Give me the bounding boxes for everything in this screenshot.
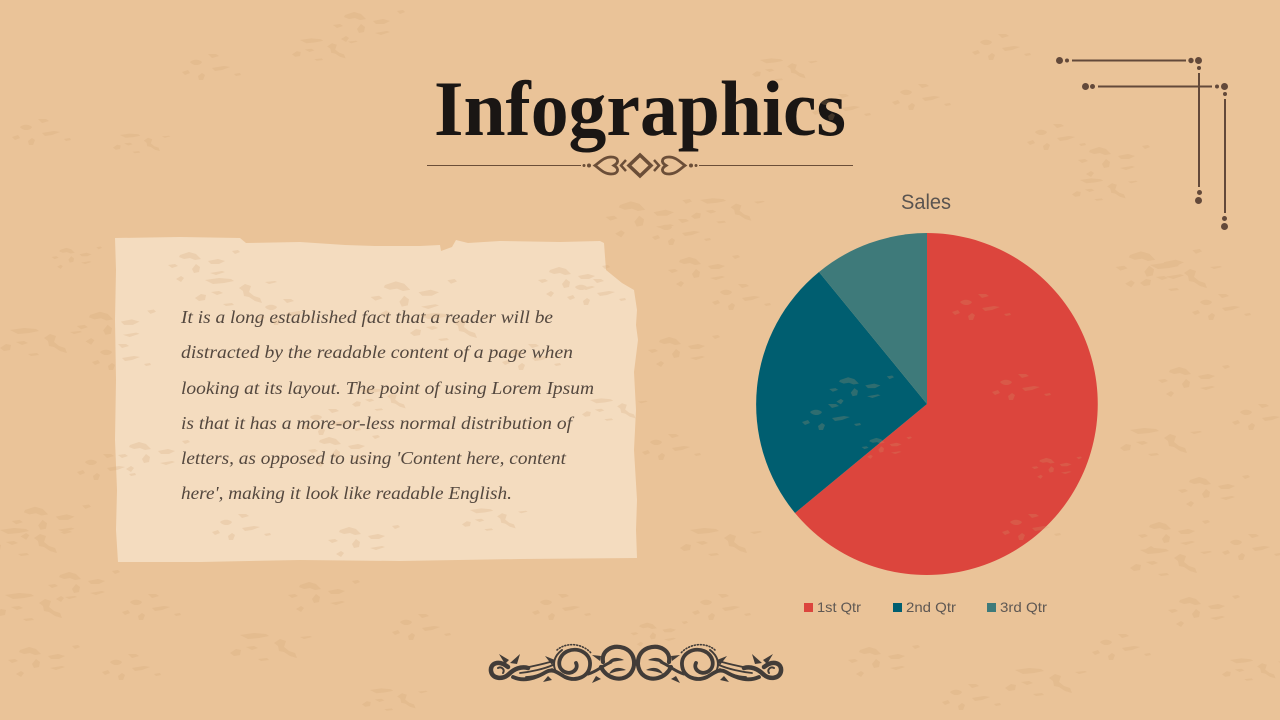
legend: 3rd Qtr — [1000, 599, 1047, 615]
chart title: Sales — [901, 191, 951, 214]
body text: here', making it look like readable English. — [181, 483, 512, 503]
body text: It is a long established fact that a reader will be — [180, 307, 553, 327]
legend: 1st Qtr — [817, 599, 861, 615]
body text: distracted by the readable content of a page when — [181, 342, 573, 362]
slice: 3rd Qtr — [819, 233, 927, 404]
body text: letters, as opposed to using 'Content here, content — [181, 448, 567, 468]
bottom ornament — [491, 645, 781, 683]
slice: 2nd Qtr — [756, 272, 927, 513]
body text: looking at its layout. The point of using Lorem Ipsum — [181, 378, 594, 398]
body text: is that it has a more-or-less normal distribution of — [181, 413, 575, 433]
legend — [804, 599, 1047, 615]
corner ornament — [1056, 57, 1228, 230]
title divider ornament — [427, 155, 853, 176]
slice: 1st Qtr — [795, 233, 1098, 575]
pie chart — [756, 233, 1098, 575]
body text — [180, 307, 594, 503]
legend: 2nd Qtr — [906, 599, 956, 615]
title: Infographics — [434, 65, 846, 152]
panel: torn paper — [115, 237, 638, 562]
